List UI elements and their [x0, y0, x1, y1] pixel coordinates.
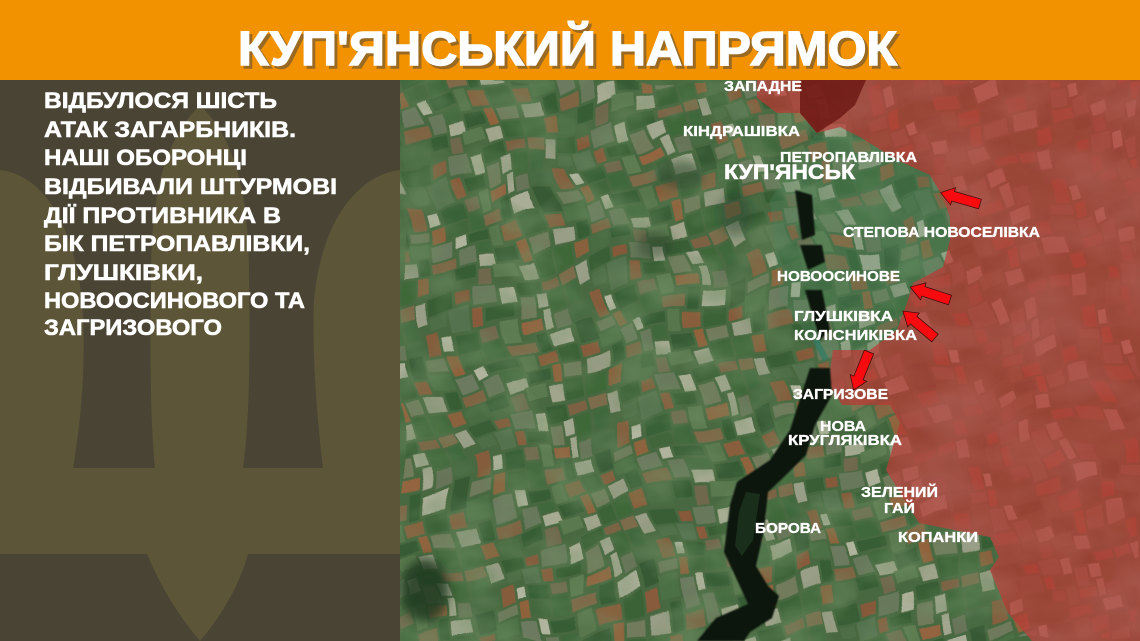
place labels: КОПАНКИ [898, 530, 978, 546]
place labels [683, 79, 1041, 546]
occupied territory [757, 80, 1140, 641]
text block: situation summary: ВІДБИВАЛИ ШТУРМОВІ [44, 174, 337, 199]
forest patches [401, 161, 753, 622]
text block: situation summary: ВІДБУЛОСЯ ШІСТЬ [44, 88, 277, 113]
controlled area near Kupiansk [770, 135, 950, 350]
arrow: Petropavlivka [940, 187, 982, 210]
place labels: ГАЙ [884, 499, 915, 517]
place labels: ЗАПАДНЕ [724, 79, 802, 95]
place labels: БОРОВА [755, 521, 822, 537]
arrow: Novoosynove [910, 282, 952, 306]
place labels: СТЕПОВА НОВОСЕЛІВКА [843, 225, 1041, 241]
arrows [845, 184, 982, 393]
reservoir island [735, 492, 760, 556]
place labels: НОВООСИНОВЕ [777, 269, 900, 285]
river and reservoir [697, 190, 832, 641]
text block: situation summary: ДІЇ ПРОТИВНИКА В [44, 203, 281, 228]
map [400, 79, 1140, 641]
place labels: ГЛУШКІВКА [794, 309, 894, 325]
text block: situation summary: НОВООСИНОВОГО ТА [44, 288, 305, 313]
text block: situation summary: ЗАГРИЗОВОГО [44, 315, 222, 340]
river channel [816, 340, 826, 360]
icon: trident emblem [0, 105, 400, 641]
text block: situation summary: НАШІ ОБОРОНЦІ [44, 145, 247, 170]
text block: situation summary: АТАК ЗАГАРБНИКІВ. [44, 117, 296, 142]
arrow: Zahryzove [850, 350, 874, 390]
header bar [0, 0, 1140, 80]
text block: situation summary [44, 88, 337, 340]
place labels: КРУГЛЯКІВКА [788, 433, 903, 449]
occupied territory, darker zone [800, 80, 866, 133]
place labels: КІНДРАШІВКА [683, 124, 801, 140]
place labels: ЗЕЛЕНИЙ [861, 483, 938, 501]
place labels: ПЕТРОПАВЛІВКА [780, 150, 918, 166]
title: КУП'ЯНСЬКИЙ НАПРЯМОК [241, 24, 901, 79]
left panel [0, 80, 400, 641]
place labels: КУП'ЯНСЬК [724, 161, 855, 184]
place labels: НОВА [820, 419, 867, 435]
text block: situation summary: ГЛУШКІВКИ, [44, 260, 203, 285]
title: КУП'ЯНСЬКИЙ НАПРЯМОК [238, 21, 898, 76]
arrow: Hlushkivka [902, 310, 939, 342]
place labels: ЗАГРИЗОВЕ [793, 387, 888, 403]
occupied territory texture [750, 80, 1140, 641]
text block: situation summary: БІК ПЕТРОПАВЛІВКИ, [44, 231, 310, 256]
place labels: КОЛІСНИКІВКА [794, 328, 918, 344]
